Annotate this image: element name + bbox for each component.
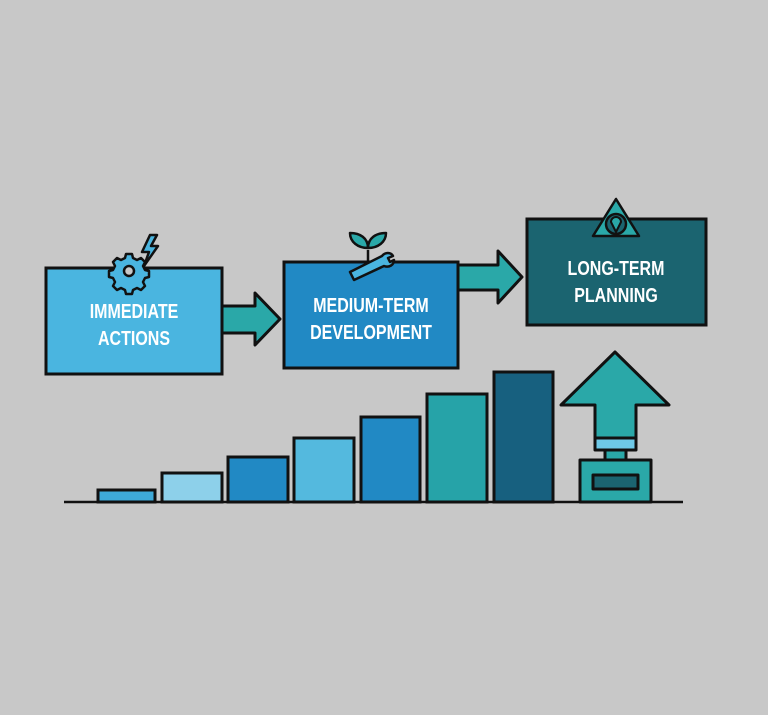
panel: immediate actions <box>46 268 222 374</box>
arrow: immediate to medium <box>222 293 280 345</box>
arrow: medium to long <box>458 251 522 303</box>
panel: immediate actions: ACTIONS <box>98 327 170 349</box>
panel: medium-term development: MEDIUM-TERM <box>313 294 429 316</box>
icon: upward arrow on pedestal <box>561 352 669 502</box>
panel: long-term planning: LONG-TERM <box>568 257 664 279</box>
panel: medium-term development <box>284 262 458 368</box>
panel: long-term planning: PLANNING <box>574 284 658 306</box>
icon: triangle target <box>593 199 639 236</box>
panel: medium-term development: DEVELOPMENT <box>310 321 432 343</box>
bar chart <box>64 372 683 502</box>
icon: gear with lightning <box>109 235 158 294</box>
icon: plant and wrench <box>350 233 394 280</box>
panel: long-term planning <box>527 219 706 325</box>
panel: immediate actions: IMMEDIATE <box>90 300 178 322</box>
